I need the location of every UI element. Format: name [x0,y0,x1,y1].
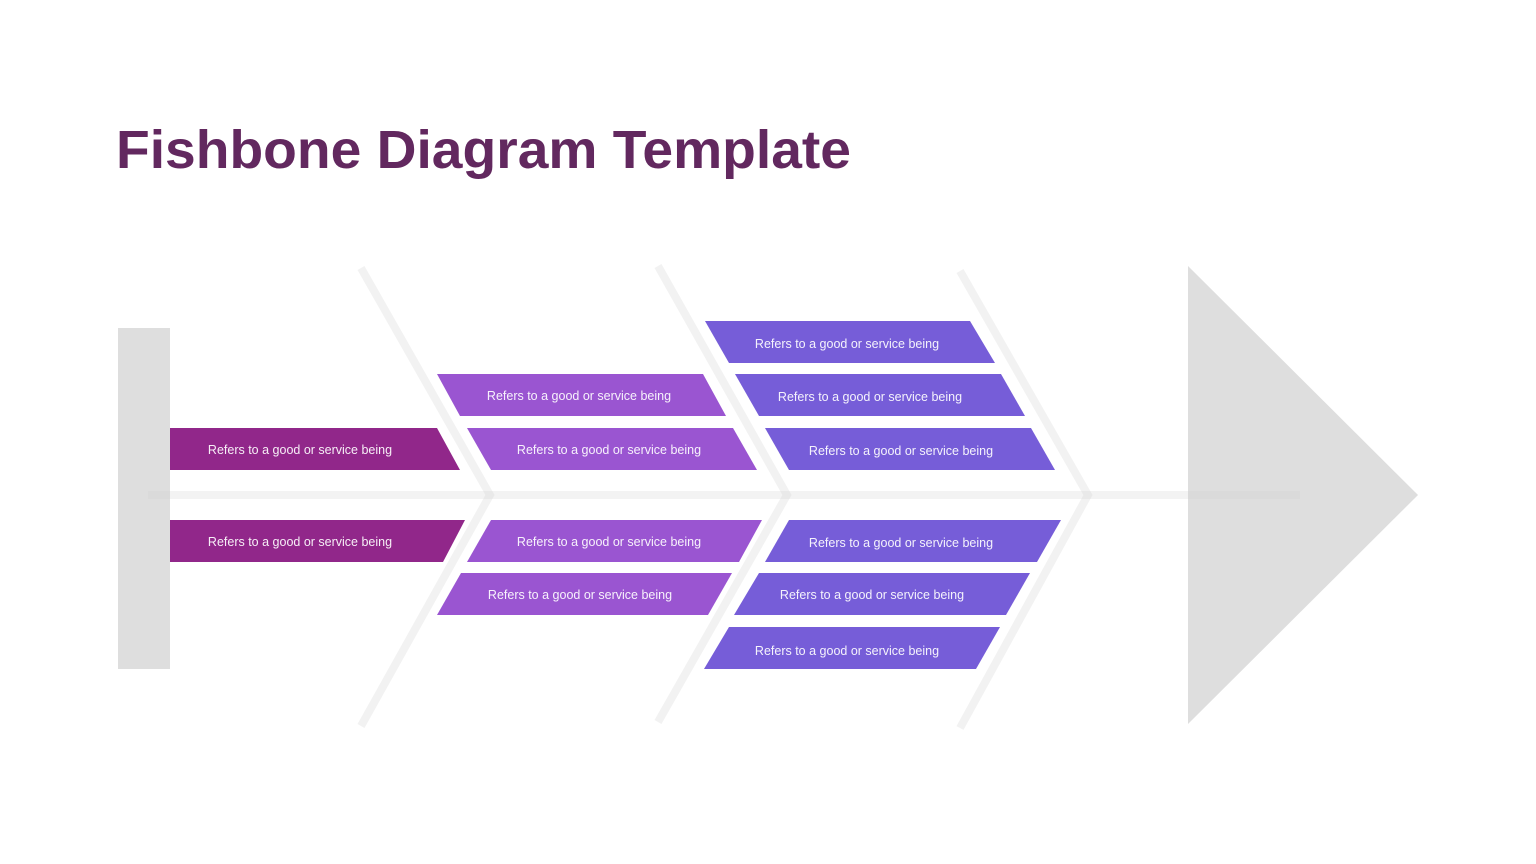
box middle E: Refers to a good or service being [488,588,672,602]
spine [148,491,1300,499]
box right D [765,520,1061,562]
box right C [765,428,1055,470]
bone chevron 3 [960,271,1088,728]
box left top [170,428,460,470]
arrow head [1188,266,1418,724]
box middle E [437,573,732,615]
box right B [735,374,1025,416]
box right A: Refers to a good or service being [755,337,939,351]
box right F [704,627,1000,669]
box middle B: Refers to a good or service being [487,389,671,403]
box middle B [437,374,726,416]
box right C: Refers to a good or service being [809,444,993,458]
box middle C [467,428,757,470]
box middle C: Refers to a good or service being [517,443,701,457]
box left bottom: Refers to a good or service being [208,535,392,549]
left bar: problem head [118,328,170,669]
box middle D [467,520,762,562]
box right E [734,573,1030,615]
box right A [705,321,995,363]
bone chevron 1 [361,268,490,726]
box right D: Refers to a good or service being [809,536,993,550]
box right E: Refers to a good or service being [780,588,964,602]
box middle D: Refers to a good or service being [517,535,701,549]
box right F: Refers to a good or service being [755,644,939,658]
box left top: Refers to a good or service being [208,443,392,457]
box left bottom [170,520,465,562]
bone chevron 2 [658,266,787,722]
title: Fishbone Diagram Template [116,120,851,180]
box right B: Refers to a good or service being [778,390,962,404]
